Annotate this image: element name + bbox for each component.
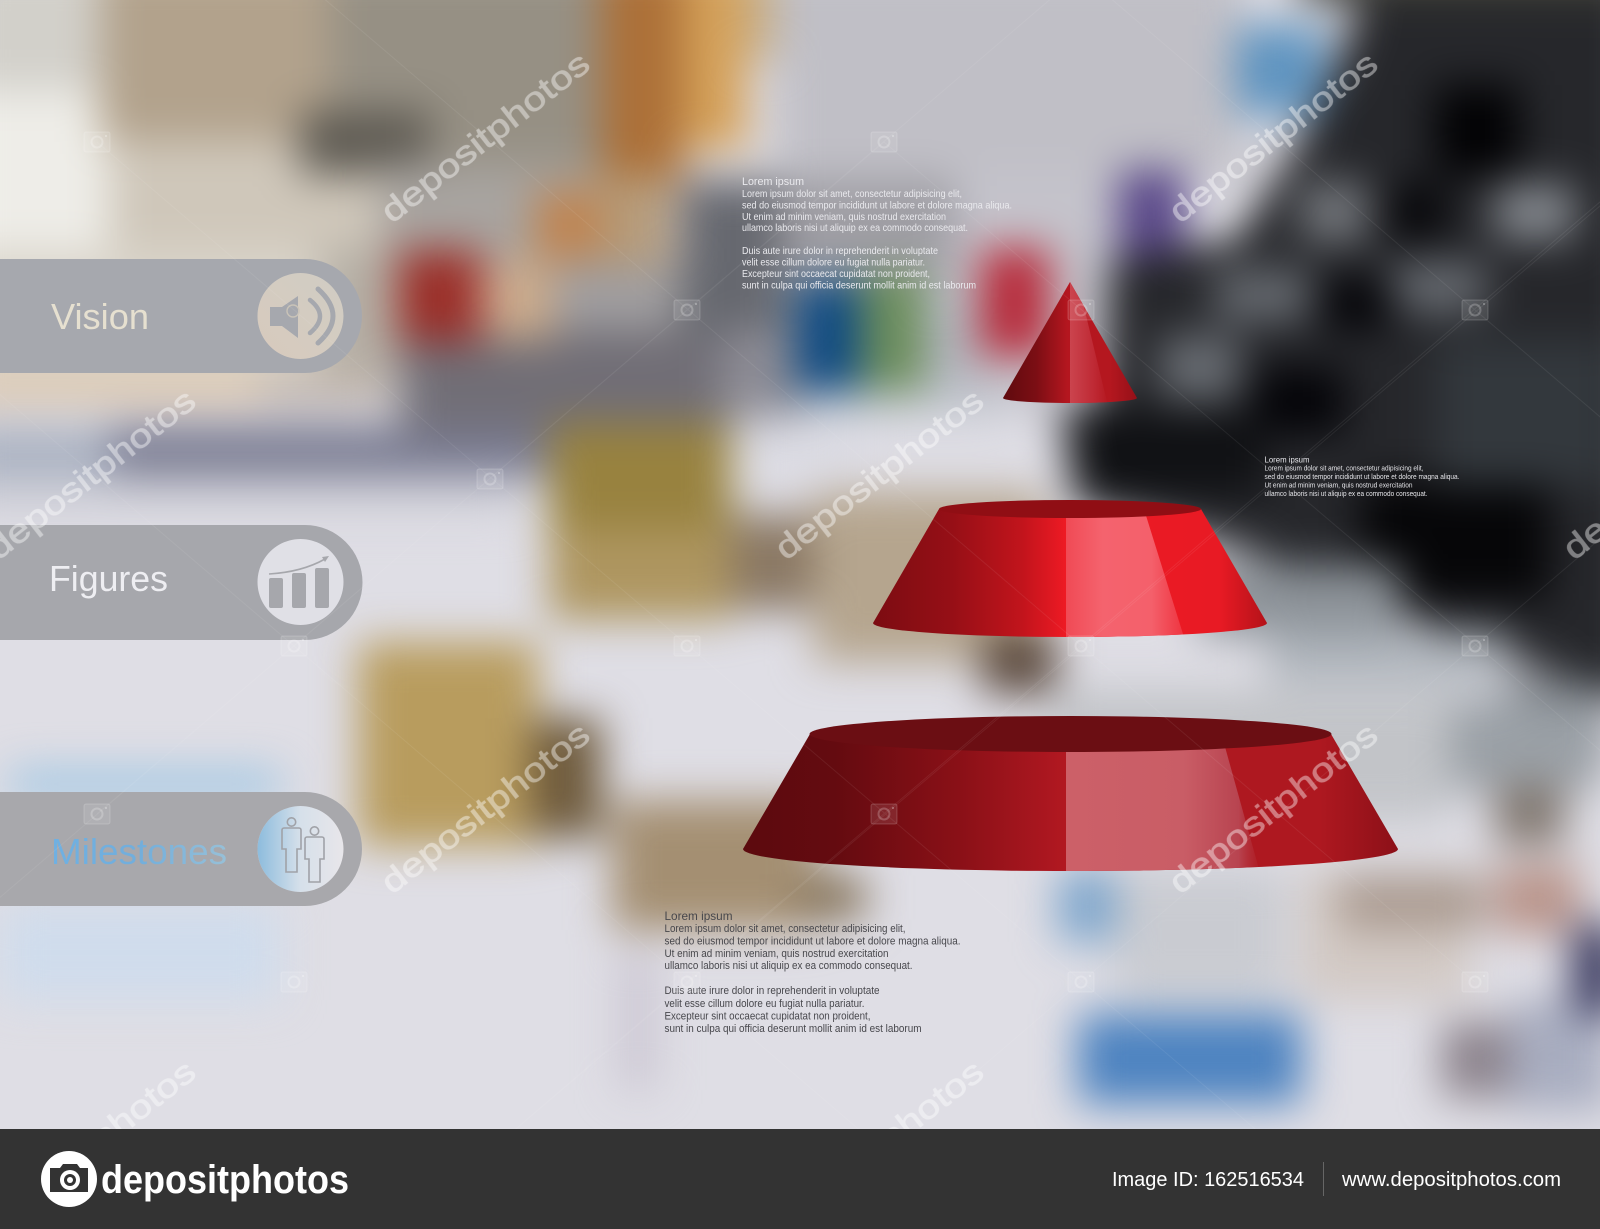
text block: bottom: sed do eiusmod tempor incididunt ut labore et dolore magna aliqua. bbox=[664, 936, 960, 948]
watermark: depositphotos text and cameras: depositphotos bbox=[767, 381, 990, 567]
text block: middle right: sed do eiusmod tempor incididunt ut labore et dolore magna aliqua. bbox=[1264, 472, 1460, 481]
text block: top: sunt in culpa qui officia deserunt mollit anim id est laborum bbox=[742, 280, 976, 292]
text block: bottom: velit esse cillum dolore eu fugiat nulla pariatur. bbox=[664, 998, 864, 1010]
panel: Vision bbox=[0, 259, 362, 373]
text block: top: velit esse cillum dolore eu fugiat nulla pariatur. bbox=[742, 258, 925, 268]
text block: top: Excepteur sint occaecat cupidatat non proident, bbox=[742, 269, 930, 280]
text block: top: Lorem ipsum dolor sit amet, consectetur adipisicing elit, bbox=[742, 189, 962, 200]
layer: bottom frustum bbox=[743, 716, 1398, 871]
layer: middle frustum bbox=[873, 500, 1267, 637]
image id: Image ID: 162516534 bbox=[1112, 1169, 1304, 1191]
watermark: depositphotos text and cameras: depositphotos bbox=[1161, 44, 1384, 230]
label: Milestones: Milestones bbox=[51, 831, 227, 872]
site url: www.depositphotos.com bbox=[1341, 1169, 1561, 1191]
text block: middle right: Ut enim ad minim veniam, quis nostrud exercitation bbox=[1264, 480, 1412, 490]
text block: bottom: Duis aute irure dolor in reprehenderit in voluptate bbox=[664, 985, 880, 997]
icon: speaker bbox=[270, 289, 333, 343]
text block: bottom: sunt in culpa qui officia deserunt mollit anim id est laborum bbox=[664, 1023, 922, 1035]
text block: top: Duis aute irure dolor in reprehenderit in voluptate bbox=[742, 246, 938, 257]
text block: bottom: Lorem ipsum bbox=[664, 909, 733, 923]
logo: depositphotos bbox=[101, 1158, 349, 1202]
text block: middle right: Lorem ipsum bbox=[1264, 454, 1310, 464]
text block: bottom: Excepteur sint occaecat cupidatat non proident, bbox=[664, 1010, 870, 1022]
chart: three-layer cone pyramid bbox=[743, 270, 1398, 880]
watermark: depositphotos text and cameras: depositphotos bbox=[1161, 715, 1384, 901]
footer bar bbox=[0, 1129, 1600, 1229]
panel: Figures bbox=[0, 525, 362, 640]
icon: bar chart with rising line bbox=[269, 556, 329, 608]
panel: Milestones bbox=[0, 792, 362, 906]
layer: top cone bbox=[1003, 282, 1137, 403]
text block: top: ullamco laboris nisi ut aliquip ex ea commodo consequat. bbox=[742, 223, 968, 234]
label: Figures: Figures bbox=[49, 558, 168, 599]
text block: top bbox=[742, 176, 1012, 292]
logo bbox=[41, 1151, 349, 1207]
text block: middle right bbox=[1264, 454, 1460, 498]
watermark: depositphotos text and cameras: depositphotos bbox=[373, 715, 596, 901]
text block: middle right: ullamco laboris nisi ut aliquip ex ea commodo consequat. bbox=[1264, 489, 1428, 498]
icon: two people bbox=[282, 818, 324, 882]
text block: bottom: Lorem ipsum dolor sit amet, consectetur adipisicing elit, bbox=[664, 923, 906, 935]
watermark: depositphotos text and cameras: depositphotos bbox=[373, 44, 596, 230]
text block: top: Ut enim ad minim veniam, quis nostrud exercitation bbox=[742, 212, 946, 223]
text block: middle right: Lorem ipsum dolor sit amet, consectetur adipisicing elit, bbox=[1264, 464, 1424, 472]
label: Vision: Vision bbox=[51, 296, 149, 337]
text block: bottom bbox=[664, 909, 960, 1035]
text block: top: sed do eiusmod tempor incididunt ut labore et dolore magna aliqua. bbox=[742, 200, 1012, 212]
text block: bottom: ullamco laboris nisi ut aliquip ex ea commodo consequat. bbox=[664, 960, 912, 972]
text block: bottom: Ut enim ad minim veniam, quis nostrud exercitation bbox=[664, 948, 888, 960]
text block: top: Lorem ipsum bbox=[742, 176, 804, 188]
